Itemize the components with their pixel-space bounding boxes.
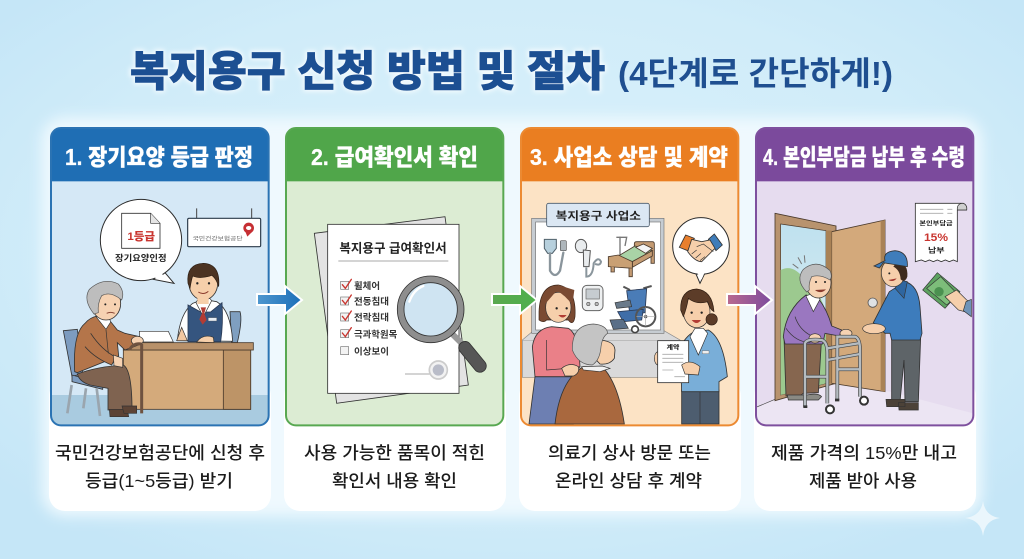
- document stack: [314, 217, 468, 403]
- step 3 caption: 온라인 상담 후 계약: [555, 471, 702, 491]
- speech bubble with grade document: [100, 199, 182, 283]
- receipt: 납부: [928, 246, 945, 255]
- shop sign: 복지용구 사업소: [556, 209, 641, 222]
- elderly recipient: [783, 255, 852, 400]
- step 3 caption: [548, 443, 711, 491]
- floor: [756, 383, 973, 425]
- consultant figure: [680, 289, 727, 424]
- speech bubble with grade document: 장기요양인정: [115, 252, 167, 263]
- sparkle icon: [965, 501, 1000, 536]
- step 1 border: [51, 128, 269, 425]
- checklist: [341, 279, 398, 357]
- step 2 caption card: [284, 380, 506, 511]
- header band: [286, 128, 503, 181]
- arrow: step 2 to 3: [492, 286, 537, 314]
- step 1 caption: 등급(1~5등급) 받기: [85, 471, 233, 491]
- device: hospital bed: [608, 237, 654, 277]
- elderly applicant: [74, 281, 143, 417]
- step 2 illustration frame: [286, 128, 503, 425]
- receipt: [915, 203, 967, 262]
- checklist: 극과학원목: [354, 328, 398, 339]
- checklist: 전동침대: [354, 295, 389, 306]
- contract paper: [654, 341, 700, 383]
- office sign: [188, 208, 261, 247]
- device: glucose meter: [582, 285, 603, 311]
- step 3 illustration frame: [521, 128, 738, 425]
- magnifying glass: [397, 276, 480, 366]
- handshake bubble: [673, 218, 729, 283]
- shop ledge: [522, 329, 680, 377]
- device: handheld massager: [575, 239, 601, 277]
- header band: [51, 128, 269, 181]
- seated elder from behind: [555, 324, 624, 424]
- shop window: [532, 218, 664, 333]
- panel: step 3: [519, 128, 741, 511]
- checklist: 이상보이: [354, 346, 389, 357]
- speech bubble with grade document: 1등급: [127, 230, 155, 243]
- staff chair: [230, 312, 241, 343]
- step 1 caption: 국민건강보험공단에 신청 후: [55, 443, 265, 463]
- document stack: 복지용구 급여확인서: [339, 241, 447, 256]
- title main: 복지용구 신청 방법 및 절차: [130, 48, 605, 95]
- step 1 caption: [55, 443, 265, 491]
- step 3 caption card: [519, 380, 741, 511]
- walker: [803, 337, 868, 413]
- panel: step 4: [754, 128, 976, 511]
- step 4 caption card: [754, 380, 976, 511]
- floor: [51, 395, 269, 427]
- staff person: [177, 263, 233, 343]
- arrow: step 1 to 2: [257, 286, 302, 314]
- title subtitle: (4단계로 간단하게!): [618, 55, 893, 92]
- receipt: 본인부담금: [919, 219, 953, 227]
- step 2 heading: 2. 급여확인서 확인: [311, 144, 478, 170]
- step 4 border: [756, 128, 973, 425]
- step 2 caption: 확인서 내용 확인: [332, 471, 457, 491]
- step 3 border: [521, 128, 738, 425]
- step 4 illustration frame: [756, 128, 973, 425]
- step 1 heading: 1. 장기요양 등급 판정: [65, 144, 253, 170]
- paper on desk: [139, 331, 173, 342]
- step 4 heading: 4. 본인부담금 납부 후 수령: [763, 144, 965, 170]
- arrow: step 3 to 4: [727, 286, 772, 314]
- checklist: 휠체어: [354, 280, 380, 291]
- step 2 caption: 사용 가능한 품목이 적힌: [304, 443, 485, 463]
- delivery person: [863, 251, 922, 410]
- office sign: 국민건강보험공단: [193, 235, 244, 243]
- desk: [123, 343, 253, 409]
- step 4 caption: 제품 가격의 15%만 내고: [771, 443, 957, 463]
- background glow behind cards: [42, 118, 982, 516]
- contract paper: 계약: [667, 343, 680, 351]
- step 3 caption: 의료기 상사 방문 또는: [548, 443, 711, 463]
- step 1 illustration frame: [51, 128, 269, 427]
- seal: [405, 361, 447, 379]
- title: [130, 48, 893, 95]
- receipt: 15%: [924, 232, 948, 244]
- checklist: 전락침대: [354, 311, 389, 322]
- shop sign: [547, 203, 649, 227]
- header band: [756, 128, 973, 181]
- step 2 border: [286, 128, 503, 425]
- door leaf: [826, 220, 885, 392]
- door frame and opening: [775, 213, 836, 401]
- device: blood pressure cuff: [544, 239, 566, 275]
- step 3 heading: 3. 사업소 상담 및 계약: [530, 144, 728, 170]
- device: wheelchair: [610, 286, 655, 333]
- title glow: 복지용구 신청 방법 및 절차: [130, 48, 605, 95]
- step 2 caption: [304, 443, 485, 491]
- panel: step 2: [284, 128, 506, 511]
- step 4 caption: [771, 443, 957, 491]
- step 4 caption: 제품 받아 사용: [809, 471, 917, 491]
- header band: [521, 128, 738, 181]
- daughter figure: [529, 285, 580, 424]
- step 1 caption card: [49, 380, 271, 511]
- visitor chair: [63, 329, 103, 416]
- cash in hand: [923, 273, 971, 317]
- panel: step 1: [49, 128, 271, 511]
